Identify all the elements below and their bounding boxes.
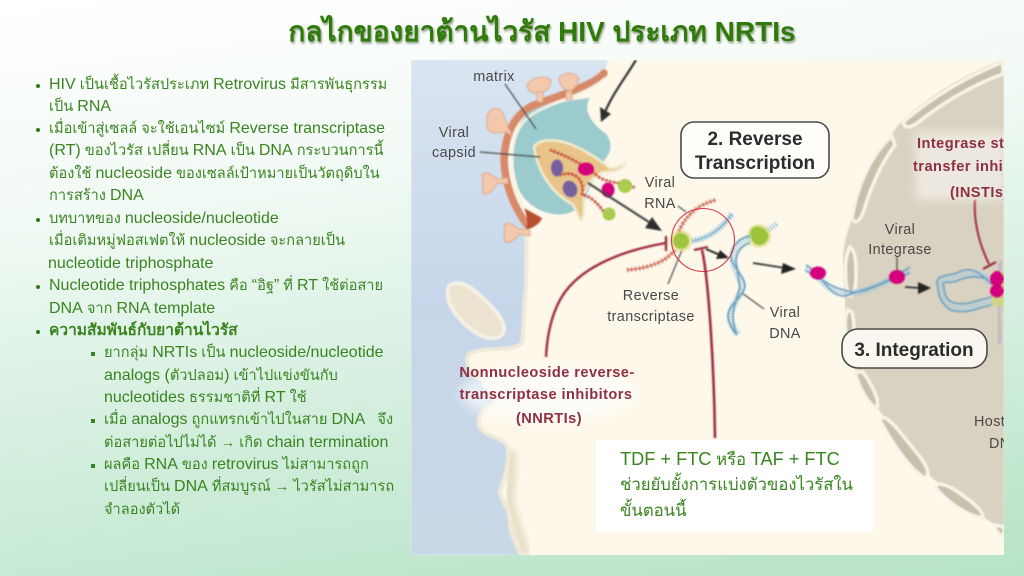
label: INSTIs bbox=[913, 132, 1024, 201]
arrow: capsid to reverse transcription bbox=[588, 183, 662, 231]
sub-bullet: NRTIs are analogs bbox=[91, 343, 383, 406]
callout: drugs delay replication bbox=[596, 440, 873, 532]
nuclear envelope bbox=[845, 62, 1004, 537]
label: NNRTIs: transcriptase inhibitors bbox=[460, 387, 632, 403]
labels: viral components: matrix bbox=[473, 69, 515, 85]
sub-bullet: NRTIs are analogs: nucleotides ธรรมชาติที่ RT ใช้ bbox=[104, 389, 307, 406]
nucleus bbox=[843, 60, 1004, 530]
label: Reverse Transcription box bbox=[681, 122, 829, 178]
labels: viral components: Viral bbox=[885, 222, 915, 238]
sub-bullet: NRTIs are analogs: analogs (ตัวปลอม) เข้าไปแข่งขันกับ bbox=[104, 367, 338, 384]
integrated DNA loop bbox=[937, 270, 992, 312]
viral DNA helix bbox=[728, 236, 750, 335]
label: NNRTIs: (NNRTIs) bbox=[516, 411, 582, 427]
text block: HIV is a retrovirus: HIV เป็นเชื้อไวรัสประเภท Retrovirus มีสารพันธุกรรม bbox=[49, 76, 387, 93]
text block: reverse transcriptase: การสร้าง DNA bbox=[49, 187, 144, 204]
labels: viral components bbox=[432, 69, 1021, 452]
labels: viral components: transcriptase bbox=[607, 309, 695, 325]
text block: HIV is a retrovirus bbox=[36, 74, 387, 115]
text block: reverse transcriptase: (RT) ของไวรัส เปลี่ยน RNA เป็น DNA กระบวนการนี้ bbox=[49, 142, 384, 159]
text block: reverse transcriptase bbox=[36, 118, 385, 204]
arrow: virus entry bbox=[600, 60, 636, 122]
sub-bullet: virus cannot replicate bbox=[91, 456, 394, 518]
vesicle bbox=[448, 283, 504, 338]
viral DNA with integrase bbox=[806, 265, 910, 296]
host DNA helix bbox=[998, 262, 1002, 345]
viral RNA strands in capsid bbox=[550, 150, 635, 218]
labels: viral components: Viral bbox=[645, 175, 675, 191]
text block: nucleotide triphosphates: Nucleotide triphosphates คือ “อิฐ” ที่ RT ใช้ต่อสาย bbox=[49, 277, 383, 294]
title: กลไกของยาต้านไวรัส HIV ประเภท NRTIs bbox=[288, 16, 796, 47]
leader lines bbox=[480, 84, 897, 309]
capsid enzymes bbox=[551, 160, 632, 220]
label: NNRTIs: Nonnucleoside reverse- bbox=[459, 365, 635, 381]
labels: viral components: Integrase bbox=[868, 242, 932, 258]
viral membrane bbox=[504, 73, 604, 230]
labels: viral components: Viral bbox=[439, 125, 469, 141]
labels: viral components: DNA bbox=[769, 326, 801, 342]
sub-bullet: virus cannot replicate: จำลองตัวได้ bbox=[104, 502, 180, 518]
reverse transcriptase enzyme bbox=[670, 224, 771, 252]
callout: drugs delay replication: ขั้นตอนนี้ bbox=[620, 501, 686, 520]
viral capsid bbox=[534, 140, 625, 221]
small arrows bbox=[706, 249, 931, 294]
inhibitor line: INSTI bbox=[975, 200, 996, 269]
sub-bullet: virus cannot replicate: เปลี่ยนเป็น DNA ที่สมบูรณ์ → ไวรัสไม่สามารถ bbox=[104, 478, 394, 495]
callout: drugs delay replication: TDF + FTC หรือ TAF + FTC bbox=[620, 449, 840, 469]
text block: nucleotide triphosphates: DNA จาก RNA template bbox=[49, 300, 215, 317]
cytoplasm background bbox=[411, 60, 1004, 555]
inhibitor line: NNRTI to RT bbox=[546, 236, 666, 357]
label: Integration box bbox=[842, 329, 987, 368]
red circle highlight bbox=[672, 208, 734, 272]
sub-bullet: NRTIs are analogs: ยากลุ่ม NRTIs เป็น nucleoside/nucleotide bbox=[104, 344, 383, 361]
text block: role of nucleoside: เมื่อเติมหมู่ฟอสเฟตให้ nucleoside จะกลายเป็น bbox=[49, 232, 345, 249]
integrase at host DNA bbox=[990, 271, 1004, 306]
text block: role of nucleoside: บทบาทของ nucleoside/nucleotide bbox=[49, 210, 279, 227]
new DNA strand bbox=[692, 214, 778, 241]
labels: viral components: capsid bbox=[432, 145, 476, 161]
viral RNA strand with reverse transcriptase bbox=[627, 200, 716, 270]
text block: reverse transcriptase: เมื่อเข้าสู่เซลล์ จะใช้เอนไซม์ Reverse transcriptase bbox=[49, 120, 385, 137]
sub-bullet: chain termination: เมื่อ analogs ถูกแทรกเข้าไปในสาย DNA จึง bbox=[104, 411, 393, 428]
cell shadow inside membrane bbox=[510, 450, 526, 555]
text block: reverse transcriptase: ต้องใช้ nucleoside ของเซลล์เป้าหมายเป็นวัตถุดิบใน bbox=[49, 165, 380, 182]
sub-bullet: virus cannot replicate: ผลคือ RNA ของ retrovirus ไม่สามารถถูก bbox=[104, 456, 369, 473]
label: Integration box: 3. Integration bbox=[854, 340, 974, 361]
inhibitor line: NRTI to DNA bbox=[694, 247, 715, 438]
text block: role of nucleoside bbox=[36, 210, 345, 272]
sub-bullet: chain termination: ต่อสายต่อไปไม่ได้ → เกิด chain termination bbox=[104, 434, 388, 451]
glycoprotein spikes bbox=[482, 73, 579, 242]
panel: HIV replication illustration bbox=[411, 60, 1004, 555]
heading: relation to antivirals: ความสัมพันธ์กับยาต้านไวรัส bbox=[49, 322, 238, 339]
labels: viral components: Viral bbox=[770, 305, 800, 321]
sub-bullet: chain termination bbox=[91, 409, 393, 451]
text block: role of nucleoside: nucleotide triphosphate bbox=[48, 255, 213, 272]
viral core: matrix bbox=[513, 98, 610, 214]
labels: viral components: Reverse bbox=[623, 288, 679, 304]
callout: drugs delay replication: ช่วยยับยั้งการแบ่งตัวของไวรัสใน bbox=[620, 475, 853, 494]
cell membrane bbox=[467, 225, 526, 380]
text block: nucleotide triphosphates bbox=[36, 275, 383, 317]
label: Reverse Transcription box: 2. Reverse bbox=[707, 129, 803, 150]
labels: viral components: RNA bbox=[644, 196, 676, 212]
label: Reverse Transcription box: Transcription bbox=[695, 153, 815, 174]
text block: HIV is a retrovirus: เป็น RNA bbox=[49, 98, 111, 115]
extracellular space bbox=[411, 60, 608, 555]
label: NNRTIs bbox=[459, 365, 636, 427]
